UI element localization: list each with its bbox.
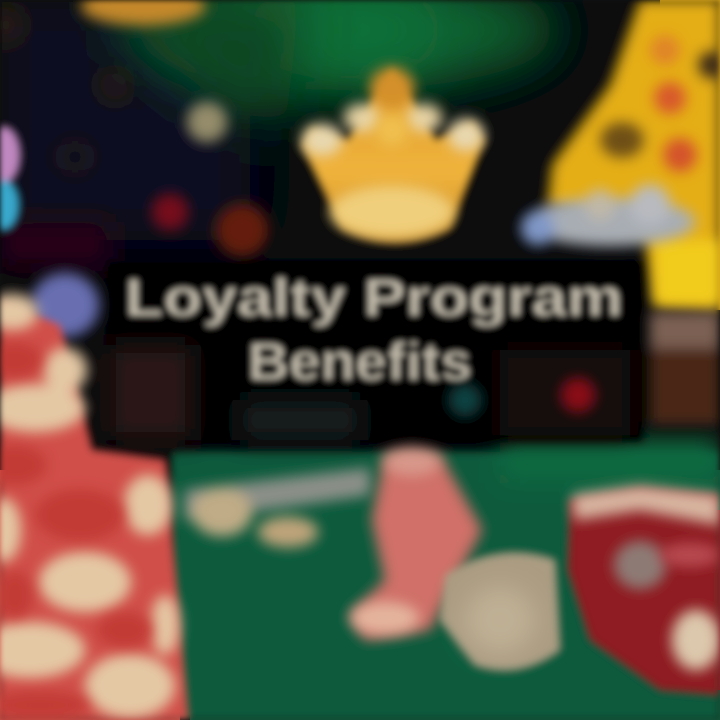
icon: golden crown: [302, 68, 484, 242]
title: Benefits: [248, 332, 472, 392]
icon: pink chip stack: [350, 448, 482, 640]
icon: neon shape at left edge: [0, 127, 20, 230]
icon: crown at top left: [81, 0, 205, 25]
icon: poker chip stack left: [0, 294, 188, 720]
cloud of cream on pizza base: [521, 185, 695, 246]
icon: beige chip stack: [440, 553, 560, 670]
green card table: [172, 438, 720, 720]
icon: scattered chips on table: [185, 468, 370, 547]
icon: blue glow above chips: [31, 273, 99, 337]
title: Loyalty Program: [125, 268, 623, 328]
right side brown table: [650, 312, 720, 425]
title: [125, 268, 623, 392]
bokeh lights: [0, 11, 268, 256]
panel: dark title backdrop: [108, 262, 643, 442]
icon: pizza slice: [548, 0, 720, 310]
icon: red chip right: [568, 486, 720, 695]
